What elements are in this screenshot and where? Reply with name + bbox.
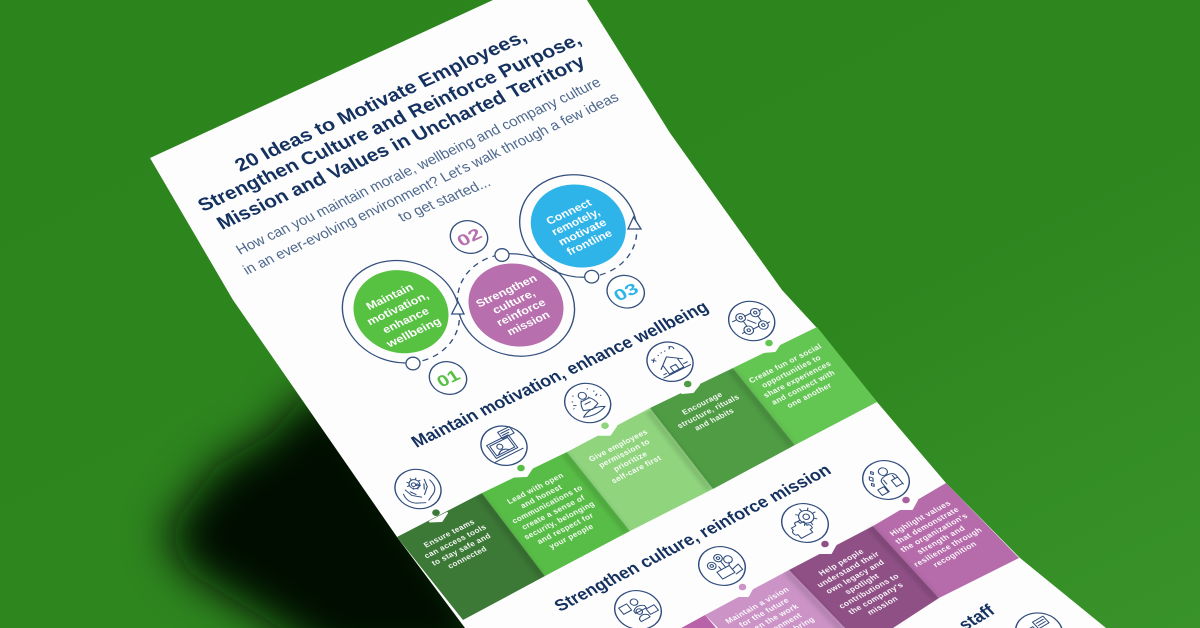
step 02 circle: culture,: [490, 288, 538, 317]
intro text: How can you maintain morale, wellbeing and company culture: [233, 75, 604, 258]
text: help people: spotlight: [843, 572, 881, 596]
text: highlight values: strength and: [915, 524, 967, 556]
text: create fun: and connect with: [770, 368, 837, 407]
paper shadow: [165, 395, 520, 628]
icon: team chat: [605, 583, 671, 628]
heading: strengthen culture: Strengthen culture, reinforce mission: [550, 460, 835, 615]
text: lead with open: and respect for: [535, 511, 595, 546]
panel: highlight values: [873, 483, 1019, 598]
text: ensure teams: to stay safe and: [430, 531, 493, 567]
text: create fun: share experiences: [762, 359, 833, 400]
text: lead with open: create a sense of: [520, 493, 587, 532]
intro text: in an ever-evolving environment? Let's walk through a few ideas: [240, 90, 622, 278]
icon: meditation: [556, 376, 620, 430]
text: ensure teams: connected: [446, 544, 489, 570]
flow diagram: three steps: [320, 157, 659, 400]
text: encourage structure: Encourage: [680, 390, 725, 417]
step 03 circle: [498, 157, 659, 295]
text: help people: [808, 543, 916, 625]
text: lead with open: and honest: [519, 483, 564, 510]
step 03 circle: frontline: [565, 228, 615, 258]
step 01 circle: motivation,: [365, 290, 431, 328]
panel: encourage structure: [650, 368, 795, 489]
step 02 circle: mission: [505, 309, 553, 338]
panel: give employees: [567, 408, 713, 531]
text: maintain a vision: for the future: [737, 596, 791, 628]
text: ensure teams: Ensure teams: [422, 517, 477, 549]
panel: create fun: [733, 327, 877, 445]
text: help people: understand their: [815, 550, 881, 589]
panel: lead with open: [482, 452, 630, 576]
badge 02: [443, 215, 495, 259]
text: give employees: self-care first: [609, 454, 663, 485]
purple notches and dots: [736, 497, 917, 596]
panel edge shading: [479, 369, 792, 577]
icon: social network: [720, 294, 784, 348]
text: help people: own legacy and: [824, 558, 886, 595]
text: encourage structure: and habits: [693, 406, 736, 433]
intro text: to get started...: [395, 175, 494, 225]
panel notches and dots: [430, 340, 780, 522]
text: lead with open: Lead with open: [505, 471, 565, 506]
text: create fun: [747, 342, 848, 417]
icon: laptop video call: [472, 419, 536, 472]
step 01 circle: Maintain: [364, 282, 416, 313]
heading: maintain motivation: Maintain motivation, enhance wellbeing: [407, 297, 712, 451]
step 03 circle: remotely,: [549, 207, 602, 238]
text: help people: the company's: [846, 581, 905, 616]
icon: gear and puzzle: [772, 496, 838, 550]
title: Strengthen Culture and Reinforce Purpose,: [194, 30, 586, 216]
icon: hands protecting virus: [386, 462, 450, 516]
icon: house and stars: [638, 335, 702, 388]
text: lead with open: communications to: [510, 483, 585, 525]
text: lead with open: [498, 467, 609, 557]
text: highlight values: the organization's: [898, 512, 970, 554]
step 03 circle: Connect: [544, 197, 595, 228]
text: create fun: Create fun or social: [747, 342, 824, 385]
badge 03: 03: [610, 280, 642, 305]
icon: staff monitors: [1006, 605, 1072, 628]
text: help people: contributions to: [837, 572, 901, 610]
panel: ensure teams: [397, 493, 545, 620]
panel: help people: [789, 526, 939, 628]
purple panel strip: [681, 483, 1019, 628]
icon: person and stars: [853, 453, 919, 507]
text: help people: mission: [865, 594, 900, 617]
title: Mission and Values in Uncharted Territory: [213, 52, 590, 234]
text: highlight values: resilience through: [912, 526, 984, 569]
text: highlight values: [884, 497, 991, 576]
text: highlight values: that demonstrate: [893, 505, 961, 546]
badge 01: [422, 356, 474, 400]
text: create fun: opportunities to: [760, 353, 823, 390]
text: maintain a vision: Maintain a vision: [723, 585, 791, 625]
text: lead with open: security, belonging: [522, 499, 597, 541]
step 02 circle: [435, 236, 597, 374]
step 02 circle: reinforce: [494, 297, 548, 329]
text: maintain a vision: [723, 585, 819, 628]
step 01 circle: [320, 243, 482, 381]
text: give employees: Give employees: [587, 427, 650, 463]
green panel strip: [397, 327, 877, 620]
text: highlight values: Highlight values: [888, 499, 953, 538]
text: help people: Help people: [817, 547, 866, 577]
text: give employees: [587, 427, 668, 487]
text: create fun: one another: [785, 381, 834, 410]
panel: maintain a vision: [705, 570, 850, 628]
text: encourage structure: [669, 384, 748, 438]
badge 03: [600, 270, 651, 314]
title: 20 Ideas to Motivate Employees,: [231, 27, 531, 176]
text: give employees: permission to: [597, 437, 652, 470]
text: give employees: prioritize: [611, 449, 650, 473]
text: highlight values: recognition: [931, 540, 979, 569]
text: lead with open: your people: [547, 522, 596, 551]
badge 01: 01: [434, 367, 464, 391]
text: ensure teams: [416, 514, 501, 576]
connector nodes: [406, 217, 641, 370]
step 03 circle: motivate: [556, 217, 609, 248]
badge 02: 02: [454, 225, 485, 250]
paper sheet: [150, 0, 1106, 628]
step 01 circle: enhance: [380, 306, 432, 336]
icon: hand with plant box: [689, 539, 755, 593]
step 02 circle: Strengthen: [474, 273, 540, 310]
step 01 circle: wellbeing: [383, 316, 444, 351]
purple panel edge shading: [786, 527, 936, 628]
text: ensure teams: can access tools: [422, 522, 489, 560]
text: encourage structure: structure, rituals: [675, 392, 742, 430]
panel: fourth purple: [630, 615, 760, 628]
